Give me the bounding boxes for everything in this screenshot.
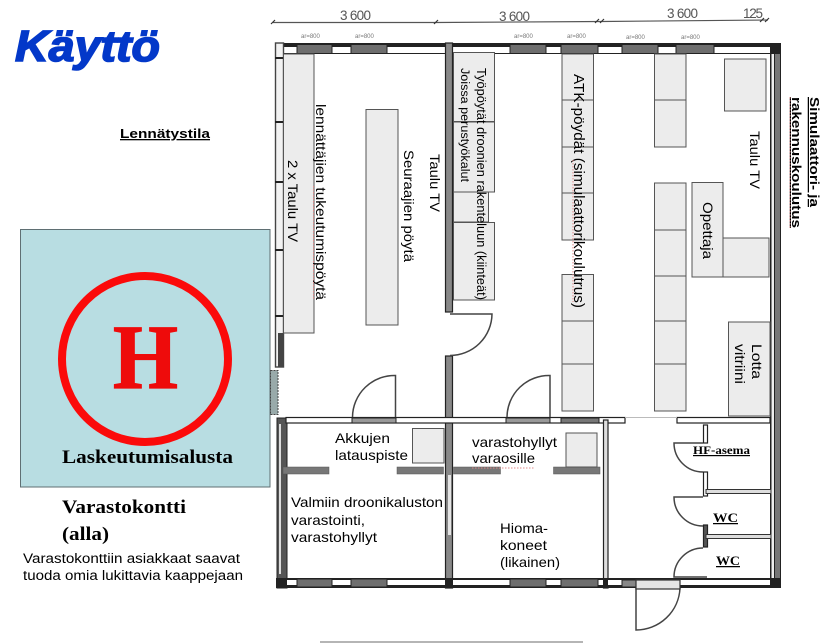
small exterior strip — [270, 370, 278, 414]
dimension line: 3 600 — [499, 9, 530, 24]
landing platform — [20, 230, 270, 487]
partition bars — [283, 467, 600, 474]
left wall lower — [277, 418, 287, 588]
furniture: workbenches — [454, 52, 494, 300]
bottom edge line — [320, 641, 583, 643]
dimension line: ar=800 — [355, 34, 375, 40]
storage container note: tuoda omia lukittavia kaappejaan — [23, 568, 243, 583]
label: simulator and construction training — [789, 97, 821, 228]
label: spare parts shelves: varaosille — [472, 450, 535, 466]
furniture: corner box — [724, 59, 766, 111]
dimension line: ar=800 — [681, 35, 701, 41]
label: simulator and construction training: rakennuskoulutus — [789, 97, 803, 228]
label: battery charging — [335, 430, 408, 463]
dimension line: 125 — [743, 6, 763, 21]
storage container heading — [62, 497, 186, 545]
furniture: display cabinet — [728, 322, 770, 416]
label: grinding machines: koneet — [500, 537, 547, 553]
label: computer desks: ATK-pöydät (simulaattorikoulutrus) — [570, 74, 586, 308]
platform label: Laskeutumisalusta — [62, 447, 234, 468]
bottom wall — [276, 578, 781, 588]
label: display cabinet: Lotta — [749, 344, 765, 379]
label: finished drone storage — [291, 494, 443, 545]
title: Käyttö — [15, 22, 160, 71]
label: finished drone storage: varastohyllyt — [291, 529, 377, 545]
top wall — [275, 43, 780, 54]
label: grinding machines — [500, 520, 560, 570]
spell-check squiggles — [314, 97, 790, 468]
helipad letter: H — [113, 306, 178, 408]
label: pilot support table: lennättäjien tukeutumispöytä — [313, 104, 329, 300]
label: WC 2: WC — [716, 554, 740, 568]
dimension line: ar=800 — [567, 34, 587, 40]
dimension line: 3 600 — [340, 8, 371, 23]
furniture: battery box — [412, 428, 444, 463]
label: battery charging: latauspiste — [335, 447, 408, 463]
label: workbench: Työpöytät droonien rakenteluun (kiinteät) — [474, 68, 489, 300]
furniture: second desk row — [654, 54, 686, 411]
label: finished drone storage: Valmiin droonikaluston — [291, 494, 443, 510]
label: simulator and construction training: Simulaattori- ja — [807, 97, 821, 208]
label: flying area: Lennätystila — [120, 126, 211, 141]
furniture: parts box — [566, 433, 597, 467]
helipad circle — [62, 276, 228, 442]
storage container note — [23, 551, 243, 583]
dimension line: ar=800 — [301, 34, 321, 40]
label: WC 1: WC — [713, 511, 738, 525]
right wall — [770, 43, 781, 588]
label: workbench: Joissa perustyökalut — [458, 68, 470, 183]
label: two screens: 2 x Taulu TV — [285, 160, 301, 243]
label: display cabinet: vitriini — [732, 344, 748, 384]
washroom walls — [704, 425, 708, 443]
label: grinding machines: (likainen) — [500, 554, 560, 570]
dimension line — [271, 6, 769, 41]
label: HF station: HF-asema — [693, 443, 750, 457]
storage container heading: (alla) — [62, 524, 109, 545]
label: workbench — [458, 68, 489, 300]
furniture: spectator table — [366, 110, 398, 325]
label: screen: Taulu TV — [427, 154, 443, 213]
label: spare parts shelves — [472, 434, 557, 466]
furniture: pilot support table — [284, 54, 314, 333]
middle wall — [446, 43, 452, 312]
second vertical wall — [604, 420, 608, 588]
label: spare parts shelves: varastohyllyt — [472, 434, 557, 450]
storage container note: Varastokonttiin asiakkaat saavat — [23, 551, 240, 566]
dimension line: 3 600 — [667, 6, 698, 21]
furniture: teacher desk — [692, 182, 769, 277]
label: spectator table: Seuraajien pöytä — [401, 150, 417, 262]
label: grinding machines: Hioma- — [500, 520, 548, 536]
dimension line: ar=800 — [626, 35, 646, 41]
horizontal wall — [286, 418, 625, 423]
doors — [352, 314, 707, 630]
storage container heading: Varastokontti — [62, 497, 186, 518]
label: finished drone storage: varastointi, — [291, 512, 365, 528]
floor plan walls — [270, 43, 781, 588]
left wall upper — [276, 43, 284, 367]
label: right screen: Taulu TV — [747, 131, 763, 190]
dimension line: ar=800 — [514, 34, 534, 40]
label: teacher: Opettaja — [700, 202, 716, 259]
label: display cabinet — [732, 344, 765, 384]
label: battery charging: Akkujen — [335, 430, 390, 446]
furniture: computer desks — [562, 54, 594, 411]
